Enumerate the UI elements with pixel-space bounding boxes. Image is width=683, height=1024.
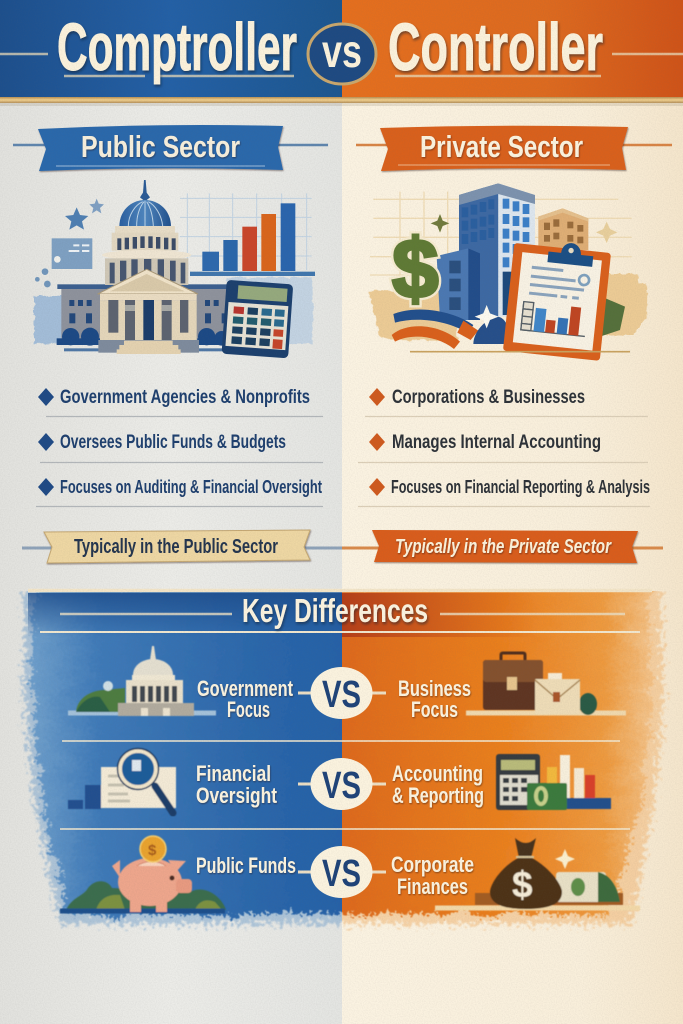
grid lines [370,192,632,277]
bullet 2: Manages Internal Accounting [392,432,601,453]
bullet 2: Oversees Public Funds & Budgets [60,432,286,453]
bullet 3 [38,477,322,497]
bullet 1: Government Agencies & Nonprofits [60,387,310,408]
illustration: corporate buildings, dollar and clipboard [368,183,647,361]
label: corporate finances: Corporate [391,852,474,877]
label: financial oversight: Financial [196,761,271,786]
stars [65,199,104,230]
bar chart [190,203,315,276]
right bullet list [358,387,650,506]
vs circle [298,667,386,719]
label: corporate finances [391,852,474,899]
green block [600,297,625,337]
title: Comptroller: Comptroller [57,10,297,85]
banner: typically in the private sector: Typically in the Private Sector [395,536,612,558]
tall building [459,183,535,317]
label: public funds: Public Funds [196,853,296,878]
icon: piggy bank [60,836,226,912]
tan building [538,208,588,250]
dollar sign: $ [392,222,439,315]
banner: typically in the private sector [342,530,663,563]
vs circle: VS [322,853,361,895]
key differences panel [24,585,664,924]
ribbon: Public Sector: Public Sector [81,129,240,164]
icon: money bag and cash: $ [512,864,533,905]
label: business focus: Focus [411,697,458,722]
icon: piggy bank: $ [148,842,157,859]
bushes [57,328,229,346]
sparkles [431,214,617,328]
capitol wings [57,284,237,344]
page background: right private panel [342,0,683,1024]
icon: briefcase and envelope [466,653,626,715]
capitol portico [98,269,199,354]
vs circle [298,758,386,810]
label: accounting & reporting [392,761,484,808]
label: government focus: Government [197,676,293,701]
heading: key differences: Key Differences [242,592,428,629]
ground strip [64,348,231,351]
icon: capitol [68,646,216,716]
label: financial oversight: Oversight [196,783,278,808]
blue half [24,585,360,924]
title rules [0,54,683,76]
vs circle [298,846,386,898]
bullet 2 [38,432,286,453]
small blue building [437,248,480,320]
left bullet list [36,387,323,506]
label: financial oversight [196,761,278,808]
label: business focus [398,676,471,722]
ribbon: Public Sector [13,125,328,171]
calculator [222,280,293,358]
dollar sign: $ [392,222,439,315]
icon: money bag and cash [435,838,640,909]
vs badge: vs [322,25,362,77]
illustration: government capitol, chart and calculator [34,180,315,358]
capitol dome [102,180,191,285]
vs circle: VS [322,765,361,807]
chart grid [180,193,312,270]
vs circle: VS [322,674,361,716]
row 3: funds [60,836,640,912]
clipboard [503,237,612,361]
vs badge [308,24,376,84]
bullet 1: Corporations & Businesses [392,387,585,408]
ribbon: Private Sector: Private Sector [420,129,583,164]
page background: left public panel [0,0,342,1024]
watercolor wash [34,277,313,344]
icon: magnifier and document [68,748,176,813]
banner: typically in the public sector [22,530,342,563]
label: business focus: Business [398,676,471,701]
bullet 3: Focuses on Auditing & Financial Oversight [60,477,322,497]
dots [35,268,51,287]
label: corporate finances: Finances [397,874,468,899]
row 2: oversight [68,748,611,813]
ribbon: Private Sector [356,126,672,171]
label: government focus [197,676,293,722]
label: accounting & reporting: Accounting [392,761,483,786]
orange half [330,585,664,924]
label: accounting & reporting: & Reporting [392,783,484,808]
icon: calculator, cash and bars [496,754,611,810]
swooshes [392,310,510,349]
header band [0,0,683,106]
header rules [28,589,652,592]
card [52,238,96,270]
label: government focus: Focus [227,697,270,722]
banner: typically in the public sector: Typically in the Public Sector [74,536,278,558]
row 1: focus [68,646,626,722]
ground line [410,349,630,354]
sand wash [368,291,457,340]
